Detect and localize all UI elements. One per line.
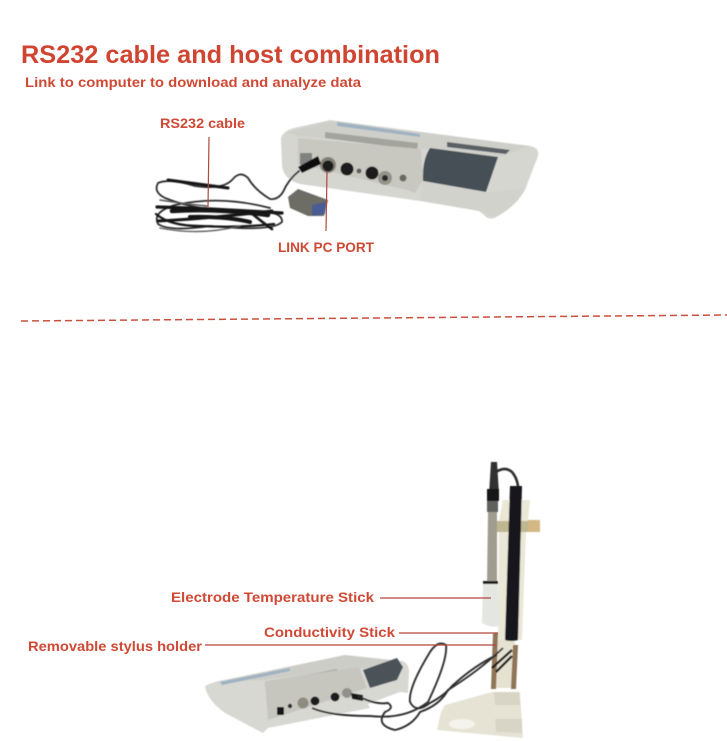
title: RS232 cable and host combination: [21, 41, 440, 69]
label: RS232 cable: RS232 cable: [160, 115, 245, 131]
DB9 serial connector: [288, 189, 328, 216]
label: Conductivity Stick: Conductivity Stick: [264, 624, 395, 640]
lower host display: [265, 669, 337, 686]
electrode temperature stick: [482, 462, 499, 627]
coiled RS232 cable: [156, 171, 299, 232]
label: RS232 cable: [160, 115, 245, 207]
stand base: [437, 692, 523, 738]
dashed divider: [21, 315, 727, 321]
stylus holder block: [498, 500, 540, 640]
host connector ports: [298, 153, 406, 185]
subtitle: Link to computer to download and analyze data: [25, 74, 361, 90]
host front connector panel: [298, 138, 423, 193]
photo: host meter with electrode stand: [205, 462, 540, 738]
label: Removable stylus holder: Removable stylus holder: [28, 638, 203, 654]
host top surface: [286, 121, 530, 157]
label: LINK PC PORT: [278, 172, 374, 255]
label: Electrode Temperature Stick: Electrode Temperature Stick: [171, 589, 374, 605]
photo: host meter with RS232 cable: [156, 120, 538, 232]
electrode cables: [312, 644, 512, 730]
lower host top surface: [215, 655, 405, 682]
conductivity stick: [496, 469, 522, 641]
lower host dark panel: [363, 658, 403, 688]
host body: [281, 120, 538, 219]
label: LINK PC PORT: LINK PC PORT: [278, 239, 374, 255]
host dark side panel: [423, 148, 498, 192]
host body lower: [205, 655, 409, 733]
lower host connector panel: [265, 667, 367, 720]
lower host ports: [277, 688, 363, 715]
stand column: [493, 640, 515, 688]
host display window: [325, 132, 418, 150]
